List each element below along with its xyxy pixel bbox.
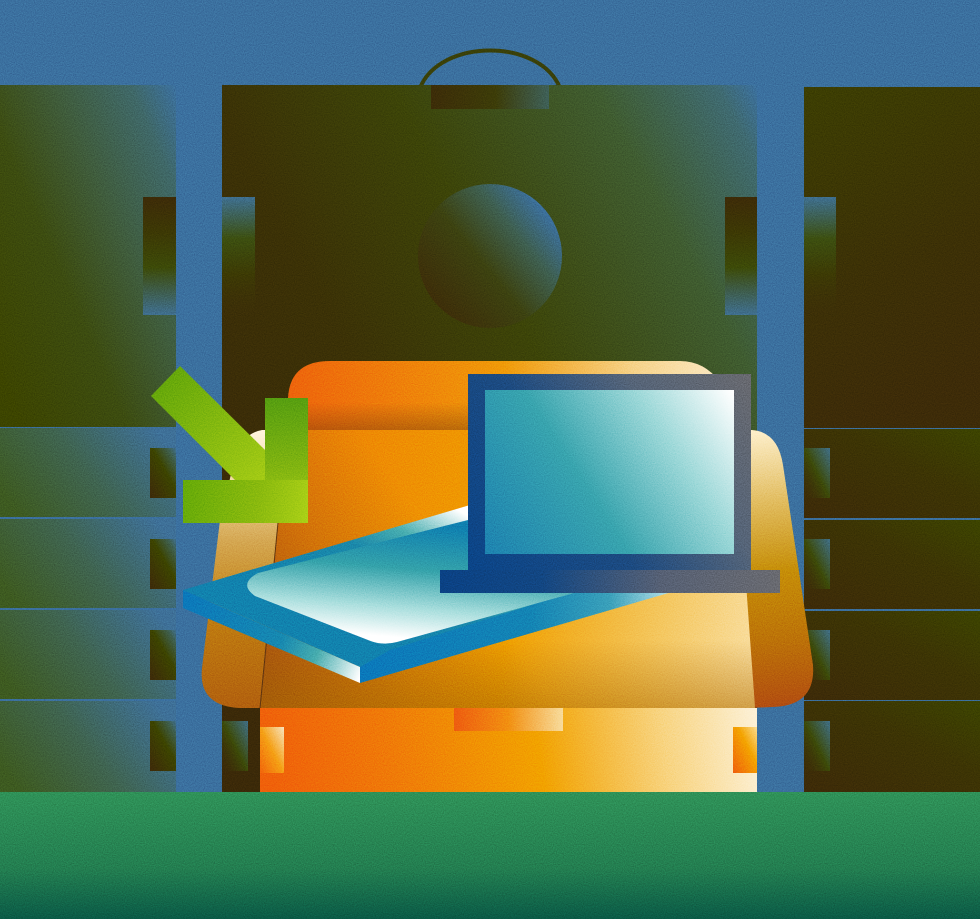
tablet left edge (183, 590, 360, 683)
icon: green arrow (151, 366, 308, 523)
chair seat (260, 430, 755, 708)
center cabinet (222, 85, 757, 792)
right cabinet drawer 2 (804, 520, 980, 609)
chair right arm (730, 430, 813, 708)
center circle (418, 184, 562, 328)
left cabinet drawer 4 (0, 701, 176, 792)
right cabinet drawer 4 (804, 701, 980, 792)
left cabinet (0, 85, 176, 792)
tablet top (183, 505, 672, 667)
left cabinet drawer 1 (0, 428, 176, 517)
chair left arm (202, 430, 290, 708)
base left tab (260, 727, 284, 773)
arrow head vertical (265, 398, 308, 523)
handle arc on center cabinet (420, 50, 560, 88)
base top tab (454, 708, 563, 731)
arrow head horizontal (183, 480, 308, 523)
left arm seam (260, 430, 287, 708)
laptop screen frame (468, 374, 751, 571)
tablet (183, 505, 672, 683)
center lower left tab (222, 721, 248, 771)
floor (0, 792, 980, 919)
laptop base (440, 570, 780, 593)
left cabinet drawer 2 (0, 519, 176, 608)
right cabinet drawer 1 (804, 429, 980, 518)
arrow shaft (151, 366, 265, 480)
tablet inner surface (247, 517, 650, 644)
right cabinet door handle (804, 197, 836, 315)
center right side tab (725, 197, 757, 315)
right cabinet upper door (804, 87, 980, 428)
left drawer handles (150, 448, 176, 771)
right cabinet (804, 87, 980, 792)
armchair (202, 361, 813, 792)
chair back (288, 361, 722, 430)
chair seat shading (260, 430, 755, 708)
center left side tab (222, 197, 255, 315)
chair back shading (288, 361, 722, 430)
left cabinet upper door (0, 85, 176, 427)
tablet front band (360, 560, 672, 683)
laptop (440, 374, 780, 593)
left cabinet drawer 3 (0, 610, 176, 699)
right drawer handles (804, 448, 830, 771)
center top handle tab (431, 85, 549, 109)
chair seat lower shading (260, 640, 755, 708)
center cabinet body (222, 85, 757, 792)
right cabinet drawer 3 (804, 611, 980, 700)
base right tab (733, 727, 757, 773)
left cabinet door handle (143, 197, 176, 315)
laptop screen (485, 390, 734, 554)
chair base (260, 708, 757, 792)
